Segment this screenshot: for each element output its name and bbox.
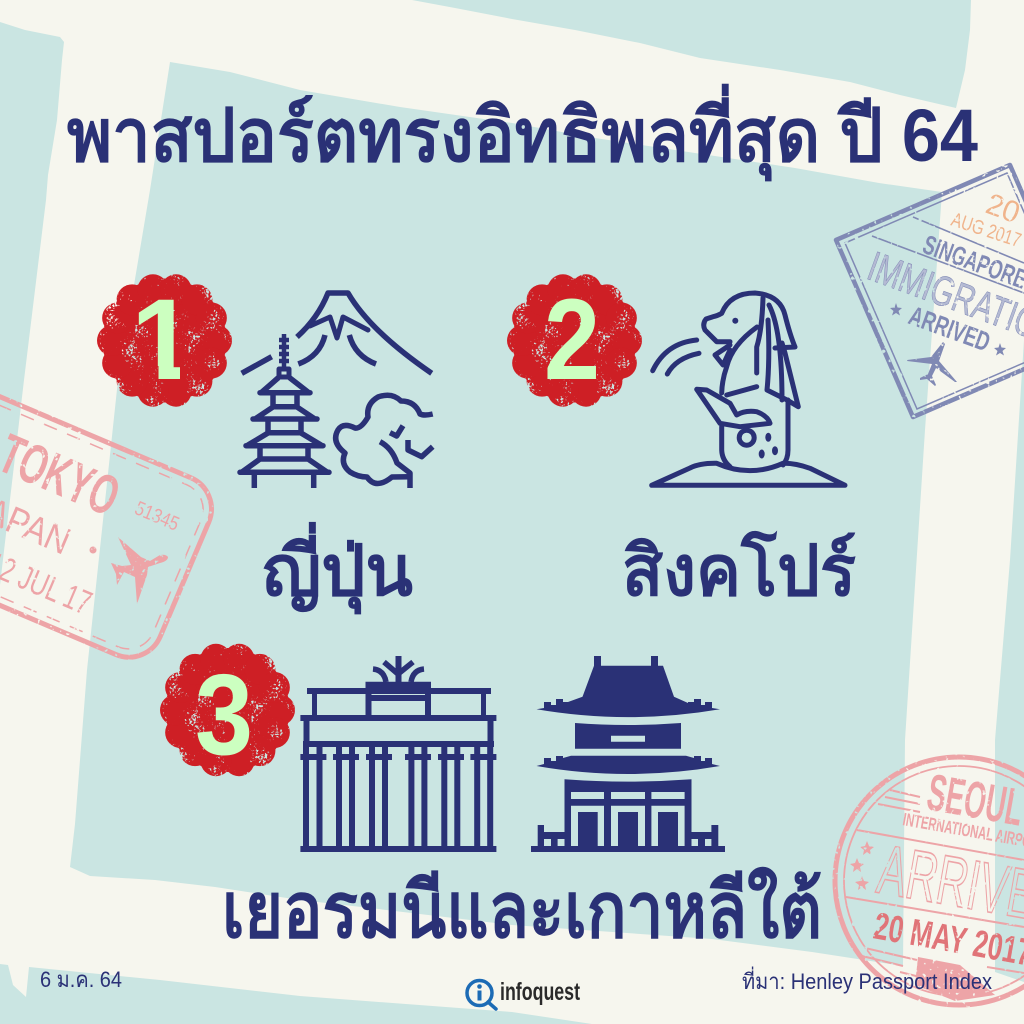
logo: infoquest [467,978,580,1009]
badge 1 [97,274,232,407]
date: 6 ม.ค. 64 [40,967,122,992]
country label: Germany and South Korea: เยอรมนีและเกาหลีใต้ [222,865,822,954]
stamp: Singapore immigration [836,165,1024,417]
stamp: Tokyo Japan [0,374,222,668]
icon: Brandenburg Gate [300,656,496,852]
logo: infoquest: infoquest [500,978,580,1006]
source: ที่มา: Henley Passport Index [742,966,992,994]
country label: Singapore: สิงคโปร์ [622,530,856,610]
badge 3: 3 [195,651,253,779]
stamp: Seoul arrived [835,757,1024,1005]
stamp: Tokyo Japan: 51345 [131,497,182,536]
badge 3 [160,644,295,779]
icon: Merlion statue [652,293,845,485]
stamp: Singapore immigration: 20 [982,188,1024,230]
icon: Korean palace gate [531,656,725,852]
title: พาสปอร์ตทรงอิทธิพลที่สุด ปี 64 [67,83,978,182]
country label: Japan: ญี่ปุ่น [262,521,413,615]
badge 1: 1 [131,276,195,404]
badge 2 [507,274,642,407]
badge 2: 2 [544,276,600,404]
icon: Japan pagoda, Mount Fuji and tree [240,293,433,488]
